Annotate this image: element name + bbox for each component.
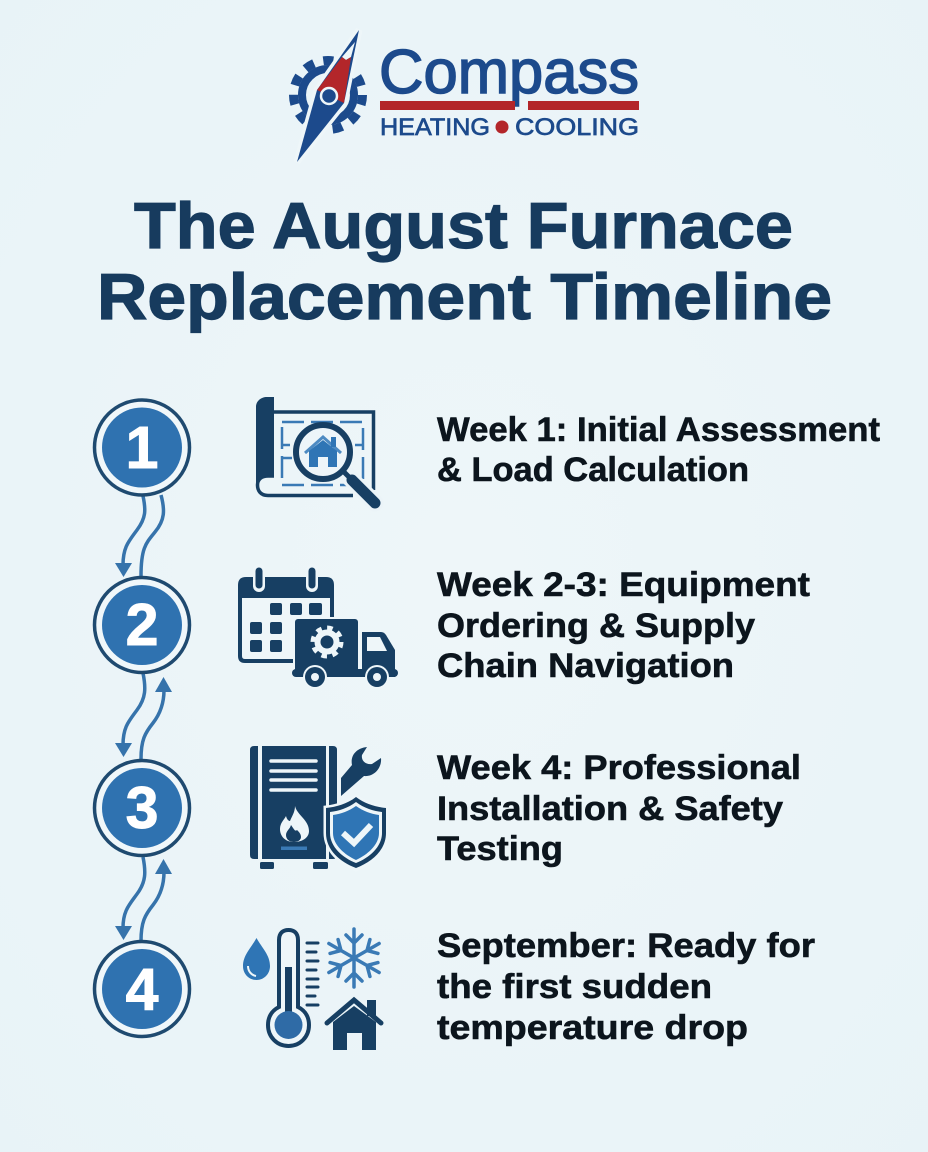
icon: blueprint with magnifier and house	[256, 397, 375, 503]
logo: Compass Heating Cooling	[294, 30, 639, 162]
title	[97, 189, 832, 333]
logo red bars	[380, 101, 639, 110]
arrows: between steps 3 and 4	[115, 857, 172, 941]
logo tagline: COOLING	[515, 114, 639, 141]
step 1 text: Week 1: Initial Assessment	[437, 411, 880, 449]
step 1 badge: 1	[126, 415, 158, 481]
step 3 text: Week 4: Professional	[437, 749, 801, 787]
logo tagline	[380, 114, 639, 141]
arrows: between steps 2 and 3	[115, 673, 172, 759]
icon: furnace with wrench and safety shield	[250, 746, 386, 869]
step 3 text	[437, 749, 801, 868]
icon: droplet, thermometer, snowflake and house	[243, 929, 383, 1050]
step 1 text	[437, 411, 880, 489]
step 3 badge: 3	[126, 775, 158, 841]
step 2 badge	[94, 578, 190, 672]
step 4 text: temperature drop	[437, 1009, 748, 1047]
icon: compass gear	[294, 30, 362, 162]
step 2 badge: 2	[126, 592, 158, 658]
step 4 badge: 4	[126, 957, 159, 1023]
step 1 badge	[94, 400, 190, 495]
step 3 text: Installation & Safety	[437, 790, 783, 828]
arrows: between steps 1 and 2	[115, 495, 163, 577]
title: Replacement Timeline	[97, 260, 832, 333]
step 2 text: Chain Navigation	[437, 647, 734, 685]
icon: calendar and delivery truck	[238, 570, 398, 689]
step 3 badge	[94, 760, 190, 856]
step 4 badge	[94, 942, 190, 1036]
step 4 text	[437, 927, 815, 1047]
step 2 text: Week 2-3: Equipment	[437, 566, 810, 604]
logo wordmark: Compass	[379, 38, 639, 107]
step 4 text: September: Ready for	[437, 927, 815, 965]
step 2 text	[437, 566, 810, 685]
step 4 text: the first sudden	[437, 968, 712, 1006]
step 3 text: Testing	[437, 830, 563, 868]
logo tagline: HEATING	[380, 114, 490, 141]
title: The August Furnace	[134, 189, 793, 262]
step 2 text: Ordering & Supply	[437, 607, 755, 645]
step 1 text: & Load Calculation	[437, 451, 749, 489]
